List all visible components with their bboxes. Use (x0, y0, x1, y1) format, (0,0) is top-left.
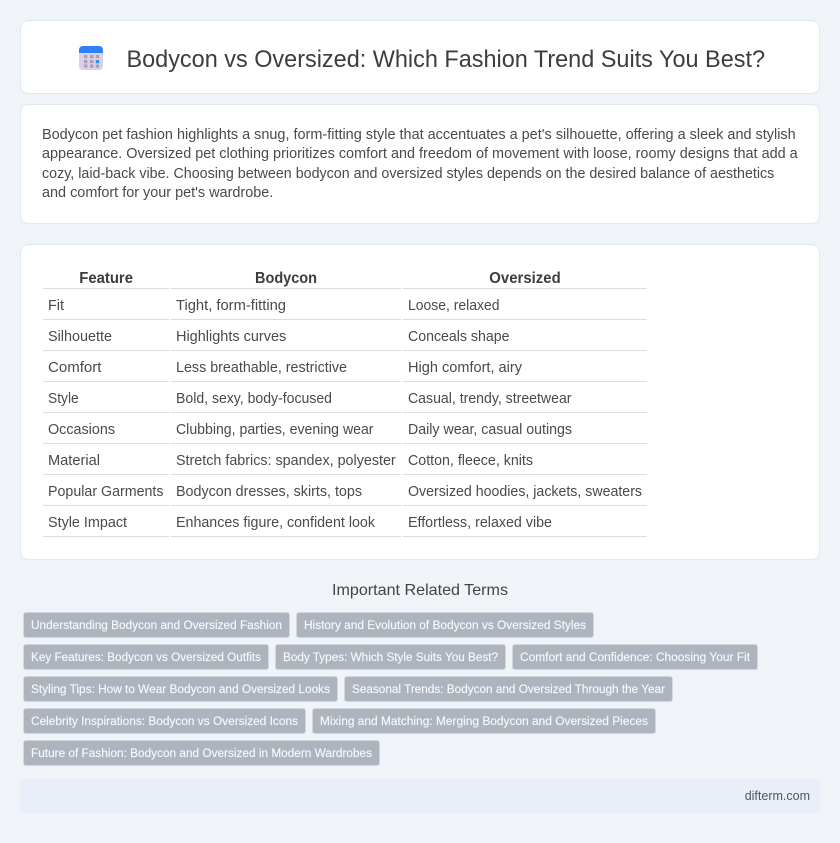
tag (312, 708, 656, 734)
tag: Future of Fashion: Bodycon and Oversized in Modern Wardrobes (31, 746, 372, 760)
tag (276, 644, 506, 670)
table row: popular garments: Popular Garments (48, 484, 164, 500)
tag (296, 612, 594, 638)
tag: Understanding Bodycon and Oversized Fashion (31, 618, 282, 632)
panel: title header (20, 20, 820, 94)
table row: material (43, 453, 647, 475)
table row: silhouette: Conceals shape (408, 329, 510, 345)
table row: fit: Loose, relaxed (408, 298, 500, 314)
table row: popular garments (43, 484, 647, 506)
table row: fit: Fit (48, 298, 64, 314)
table row: silhouette: Silhouette (48, 329, 112, 345)
table row: popular garments: Bodycon dresses, skirts, tops (176, 484, 362, 500)
table row: occasions: Daily wear, casual outings (408, 422, 572, 438)
table row: comfort: Less breathable, restrictive (176, 360, 347, 376)
table row: comfort (43, 360, 647, 382)
table row: style impact (43, 515, 647, 537)
table row: occasions: Clubbing, parties, evening wear (176, 422, 374, 438)
text block: description: and comfort for your pet's wardrobe. (42, 185, 273, 201)
table row: material: Stretch fabrics: spandex, polyester (176, 453, 396, 469)
table header row: Feature (79, 270, 133, 287)
table row: style: Casual, trendy, streetwear (408, 391, 572, 407)
table row: comfort: Comfort (48, 360, 102, 376)
tag: Body Types: Which Style Suits You Best? (283, 650, 498, 664)
table row: occasions (43, 422, 647, 444)
text block: description: Bodycon pet fashion highlights a snug, form-fitting style that accentuates a pet's silhouette, offering a sleek and stylish (42, 127, 796, 143)
tag (24, 740, 380, 766)
table row: fit: Tight, form-fitting (176, 298, 286, 314)
tag: Celebrity Inspirations: Bodycon vs Oversized Icons (31, 714, 298, 728)
table row: style impact: Effortless, relaxed vibe (408, 515, 552, 531)
table row: style: Bold, sexy, body-focused (176, 391, 332, 407)
table row: style: Style (48, 391, 79, 407)
table header row: Bodycon (255, 270, 317, 287)
text block: description: appearance. Oversized pet clothing prioritizes comfort and freedom of movement with loose, roomy designs that add a (42, 146, 799, 162)
tag: History and Evolution of Bodycon vs Oversized Styles (304, 618, 586, 632)
table row: style impact: Style Impact (48, 515, 127, 531)
table row: fit (43, 298, 647, 320)
icon: calendar (79, 46, 103, 70)
tag (512, 644, 758, 670)
title: Bodycon vs Oversized: Which Fashion Trend Suits You Best? (126, 46, 765, 73)
tag: Comfort and Confidence: Choosing Your Fit (520, 650, 751, 664)
footer (20, 779, 820, 813)
text block: description (42, 127, 799, 201)
tag (24, 676, 338, 702)
panel: comparison table (20, 244, 820, 560)
heading: related terms: Important Related Terms (332, 582, 508, 599)
tag (24, 708, 306, 734)
table header row: Oversized (489, 270, 561, 287)
table row: silhouette (43, 329, 647, 351)
table row: style (43, 391, 647, 413)
table row: occasions: Occasions (48, 422, 115, 438)
table row: material: Cotton, fleece, knits (408, 453, 533, 469)
table header row (43, 270, 647, 289)
text block: description: cozy, laid-back vibe. Choosing between bodycon and oversized styles depends on the desired balance of aesthetics (42, 166, 774, 182)
tag (344, 676, 672, 702)
table row: popular garments: Oversized hoodies, jackets, sweaters (408, 484, 642, 500)
tag: Key Features: Bodycon vs Oversized Outfits (31, 650, 261, 664)
tag (24, 644, 268, 670)
tag (24, 612, 290, 638)
panel: intro paragraph (20, 104, 820, 224)
tag: Mixing and Matching: Merging Bodycon and Oversized Pieces (320, 714, 648, 728)
table row: style impact: Enhances figure, confident look (176, 515, 376, 531)
tag: Styling Tips: How to Wear Bodycon and Oversized Looks (31, 682, 330, 696)
table row: material: Material (48, 453, 100, 469)
related term tags (24, 612, 758, 766)
table row: comfort: High comfort, airy (408, 360, 523, 376)
tag: Seasonal Trends: Bodycon and Oversized Through the Year (352, 682, 665, 696)
footer site name: difterm.com (745, 789, 810, 803)
table row: silhouette: Highlights curves (176, 329, 286, 345)
